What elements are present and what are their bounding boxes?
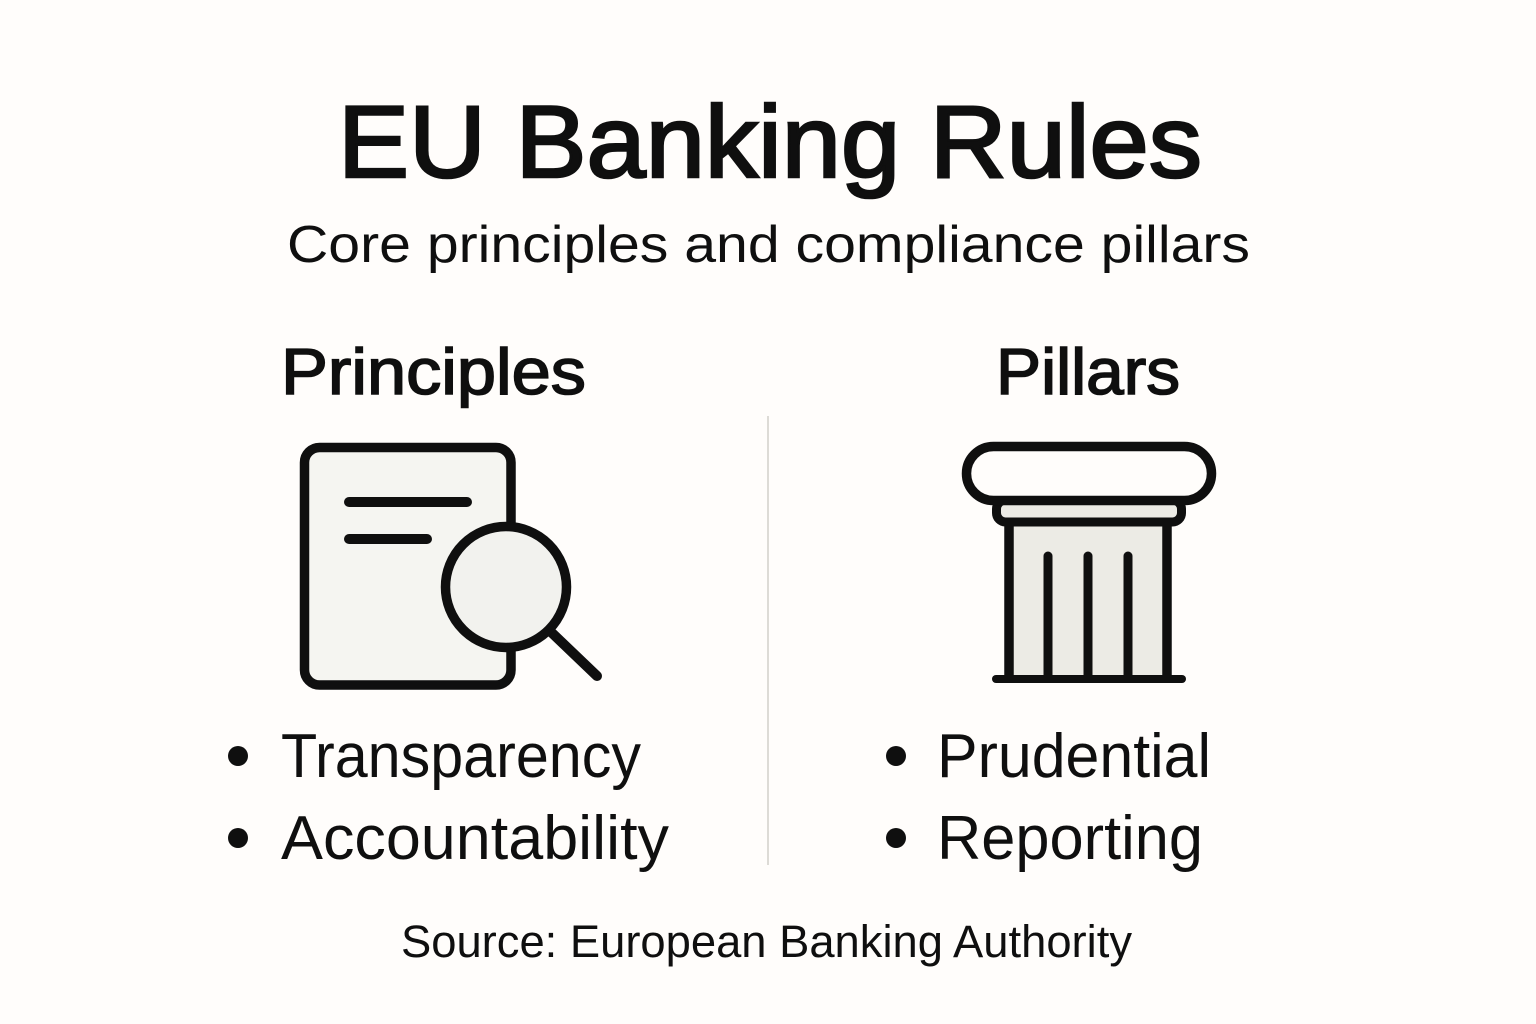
divider between panels xyxy=(767,416,769,865)
list: pillars: Reporting xyxy=(937,804,1203,873)
panel: principles xyxy=(228,335,669,873)
list: principles: Transparency xyxy=(281,722,641,791)
icon: document with magnifying glass xyxy=(304,448,597,685)
source note: Source: European Banking Authority xyxy=(401,916,1132,967)
list: pillars xyxy=(886,722,1211,873)
subtitle: Core principles and compliance pillars xyxy=(287,216,1250,274)
list: principles xyxy=(228,722,669,873)
list: pillars: Prudential xyxy=(937,722,1211,791)
title: EU Banking Rules xyxy=(338,85,1202,199)
heading: pillars: Pillars xyxy=(996,335,1180,408)
panel: pillars xyxy=(886,335,1212,873)
heading: principles: Principles xyxy=(281,335,586,408)
icon: classical column xyxy=(966,446,1212,679)
list: principles: Accountability xyxy=(281,804,669,873)
